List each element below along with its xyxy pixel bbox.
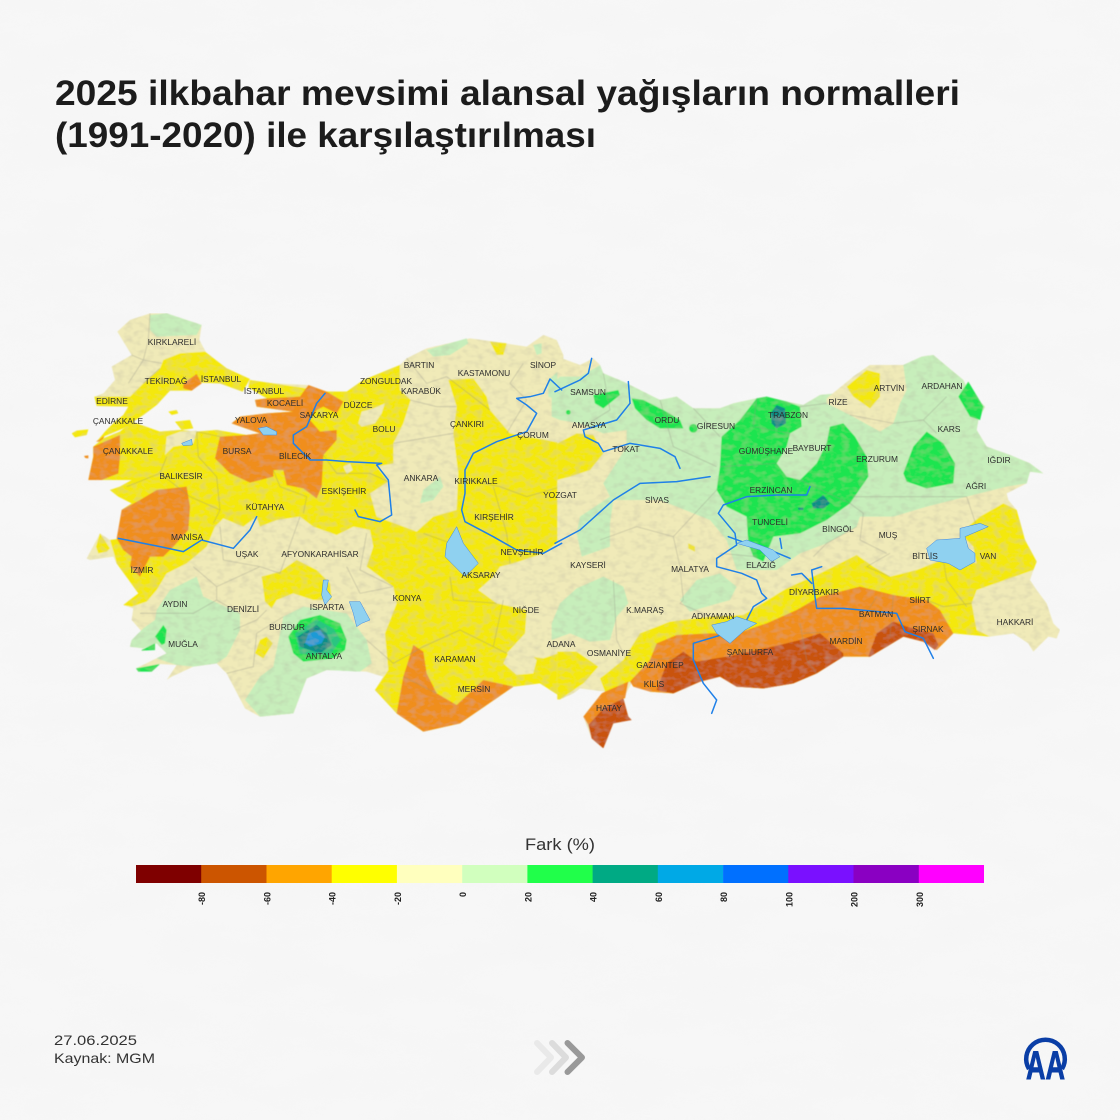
- dark orange: Şanlıurfa: [657, 633, 843, 693]
- date and source: [54, 1032, 155, 1066]
- legend tick labels: 300: [915, 892, 925, 907]
- legend tick labels: 60: [654, 892, 664, 902]
- province name labels: KARS: [938, 424, 961, 434]
- pale green: Aegean: [130, 577, 240, 667]
- province name labels: KASTAMONU: [458, 368, 510, 378]
- title: [55, 74, 960, 155]
- coloured anomaly regions: [72, 313, 1060, 748]
- province name labels: ÇANAKKALE: [93, 416, 144, 426]
- province name labels: BALIKESİR: [159, 471, 203, 481]
- east half regions: [552, 355, 1060, 748]
- province name labels: SAKARYA: [300, 410, 339, 420]
- province name labels: ADANA: [547, 639, 576, 649]
- province name labels: TEKİRDAĞ: [145, 376, 187, 386]
- province name labels: KÜTAHYA: [246, 502, 285, 512]
- orange: south-east: [630, 587, 953, 693]
- province name labels: BİNGÖL: [822, 524, 854, 534]
- province name labels: AYDIN: [163, 599, 187, 609]
- province name labels: KIRKLARELİ: [148, 337, 196, 347]
- beige around Artvin: [827, 365, 907, 432]
- province name labels: K.MARAŞ: [626, 605, 664, 615]
- bright green: Ardahan: [958, 382, 983, 420]
- province name labels: ELAZIĞ: [746, 560, 776, 570]
- pale green: north and east: [552, 355, 1043, 570]
- province name labels: ANTALYA: [306, 651, 343, 661]
- pale holes in yellow: [358, 403, 385, 427]
- province name labels: GİRESUN: [697, 421, 735, 431]
- islands: [72, 429, 88, 437]
- bright green: Erzincan / Erzurum: [717, 397, 868, 562]
- base: Thrace: [95, 313, 250, 442]
- province name labels: KIRIKKALE: [454, 476, 498, 486]
- yellow patches: [847, 370, 880, 408]
- province name labels: AKSARAY: [462, 570, 501, 580]
- province name labels: ŞIRNAK: [912, 624, 944, 634]
- logo: AA: AA: [1026, 1044, 1065, 1088]
- pale green: Antalya: [245, 607, 372, 717]
- province name labels: ARTVİN: [874, 383, 904, 393]
- province borders west: [127, 313, 562, 693]
- province name labels: ÇANAKKALE: [103, 446, 154, 456]
- province name labels: AMASYA: [572, 420, 607, 430]
- province name labels: SİİRT: [909, 595, 931, 605]
- legend title: Fark (%): [525, 835, 595, 854]
- province name labels: KİLİS: [644, 679, 665, 689]
- province name labels: ÇORUM: [517, 430, 549, 440]
- province name labels: AĞRI: [966, 481, 986, 491]
- province name labels: YOZGAT: [543, 490, 577, 500]
- province name labels: BİTLİS: [912, 551, 938, 561]
- province name labels: DİYARBAKIR: [789, 587, 839, 597]
- province name labels: KONYA: [393, 593, 422, 603]
- legend tick labels: 20: [524, 892, 534, 902]
- dark orange: Şırnak: [868, 622, 938, 657]
- legend tick labels: -40: [328, 892, 338, 905]
- province name labels: RİZE: [828, 397, 848, 407]
- province name labels: AFYONKARAHİSAR: [281, 549, 359, 559]
- icon: chevrons: [537, 1043, 582, 1072]
- title: 2025 ilkbahar mevsimi alansal yağışların normalleri: [55, 74, 960, 113]
- rivers: [118, 358, 933, 713]
- province name labels: DÜZCE: [344, 400, 373, 410]
- base: west Anatolia: [87, 335, 563, 732]
- legend colour bar: [136, 865, 984, 883]
- orange: Hatay: [583, 682, 628, 725]
- province name labels: İSTANBUL: [244, 386, 285, 396]
- province name labels: YALOVA: [235, 415, 268, 425]
- date and source: Kaynak: MGM: [54, 1050, 155, 1066]
- bright green: Kars: [903, 432, 955, 488]
- province name labels: TRABZON: [768, 410, 808, 420]
- province name labels: BAYBURT: [793, 443, 831, 453]
- province name labels: NEVŞEHİR: [501, 547, 543, 557]
- province name labels: BURSA: [223, 446, 252, 456]
- province borders east: [583, 373, 977, 673]
- province name labels: SİNOP: [530, 360, 556, 370]
- province name labels: BİLECİK: [279, 451, 311, 461]
- teal spots: [771, 405, 786, 428]
- province name labels: İZMİR: [131, 565, 153, 575]
- base: east Anatolia: [557, 355, 1060, 748]
- west half regions: [72, 313, 563, 732]
- logo: AA: [1026, 1040, 1065, 1088]
- province name labels: MUŞ: [879, 530, 898, 540]
- legend tick labels: [197, 892, 925, 907]
- province name labels: BURDUR: [269, 622, 305, 632]
- province name labels: KIRŞEHİR: [474, 512, 514, 522]
- bright green: [155, 625, 167, 645]
- province name labels: KARAMAN: [434, 654, 476, 664]
- province name labels: BARTIN: [404, 360, 434, 370]
- title: (1991-2020) ile karşılaştırılması: [55, 116, 596, 155]
- province name labels: GAZİANTEP: [636, 660, 684, 670]
- pale green small patches: [420, 477, 443, 503]
- province name labels: TUNCELİ: [752, 517, 788, 527]
- legend tick labels: 0: [458, 892, 468, 897]
- province name labels: ISPARTA: [310, 602, 345, 612]
- province name labels: SAMSUN: [570, 387, 606, 397]
- orange: [183, 374, 202, 391]
- yellow: south-east belt: [600, 503, 1037, 693]
- province name labels: [93, 337, 1033, 713]
- province name labels: NİĞDE: [513, 605, 540, 615]
- pale green: north of Thrace: [150, 313, 202, 337]
- dark orange: Hatay: [588, 698, 632, 748]
- province name labels: MERSİN: [458, 684, 490, 694]
- province name labels: ANKARA: [404, 473, 439, 483]
- province name labels: EDİRNE: [96, 396, 128, 406]
- province name labels: HAKKARİ: [997, 617, 1033, 627]
- province name labels: ARDAHAN: [922, 381, 962, 391]
- province name labels: BATMAN: [859, 609, 893, 619]
- province name labels: ERZURUM: [856, 454, 898, 464]
- province name labels: BOLU: [373, 424, 395, 434]
- province name labels: OSMANİYE: [587, 648, 632, 658]
- legend tick labels: 100: [784, 892, 794, 907]
- province name labels: KAYSERİ: [570, 560, 606, 570]
- wet core near Antalya: [288, 615, 347, 662]
- legend tick labels: 80: [719, 892, 729, 902]
- province name labels: MALATYA: [671, 564, 709, 574]
- province name labels: ŞANLIURFA: [727, 647, 774, 657]
- province name labels: ERZİNCAN: [750, 485, 792, 495]
- province name labels: IĞDIR: [987, 455, 1011, 465]
- province name labels: ÇANKIRI: [450, 419, 484, 429]
- province name labels: KARABÜK: [401, 386, 441, 396]
- province name labels: ZONGULDAK: [360, 376, 412, 386]
- map of Türkiye: rainfall anomaly: [72, 313, 1060, 748]
- province name labels: UŞAK: [236, 549, 259, 559]
- province name labels: TOKAT: [612, 444, 640, 454]
- legend tick labels: -20: [393, 892, 403, 905]
- legend tick labels: -60: [262, 892, 272, 905]
- legend tick labels: 40: [588, 892, 598, 902]
- province name labels: ADIYAMAN: [691, 611, 735, 621]
- province name labels: İSTANBUL: [201, 374, 242, 384]
- province name labels: HATAY: [596, 703, 622, 713]
- province name labels: VAN: [980, 551, 996, 561]
- province name labels: SİVAS: [645, 495, 669, 505]
- lakes: [182, 427, 988, 643]
- date and source: 27.06.2025: [54, 1032, 137, 1048]
- province name labels: MANİSA: [171, 532, 203, 542]
- province name labels: GÜMÜŞHANE: [739, 446, 794, 456]
- province name labels: MARDİN: [829, 636, 863, 646]
- province name labels: ORDU: [655, 415, 679, 425]
- province name labels: KOCAELİ: [267, 398, 303, 408]
- legend tick labels: -80: [197, 892, 207, 905]
- yellow: north-west and central belt: [94, 352, 250, 442]
- bright green: Ordu: [632, 398, 683, 428]
- province name labels: DENİZLİ: [227, 604, 259, 614]
- legend tick labels: 200: [850, 892, 860, 907]
- province name labels: ESKİŞEHİR: [322, 486, 366, 496]
- bright green: Samsun: [593, 390, 620, 408]
- province name labels: MUĞLA: [168, 639, 198, 649]
